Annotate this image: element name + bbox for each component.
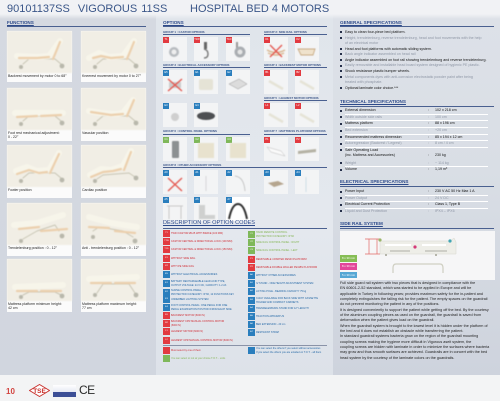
list: option codes left column bbox=[163, 230, 234, 344]
table: technical specifications: 1,19 m³ bbox=[435, 167, 447, 171]
option tile: hand remote bbox=[163, 137, 187, 161]
option tile: resin platform bbox=[264, 137, 288, 161]
option tile: stand bbox=[295, 170, 319, 194]
list: option codes right column: SIDE RAIL CONTROL PANEL : RIGHT bbox=[256, 241, 299, 244]
option tile: extension: A6 bbox=[195, 198, 199, 201]
option tile: traction bbox=[163, 197, 187, 221]
list: option codes left column: T1 bbox=[165, 232, 168, 234]
text block: side rail description: It is designed conveniently to support the patient while getting off the bed. By the courtesy bbox=[340, 308, 489, 312]
option tile: restraint: A7 bbox=[227, 198, 231, 201]
table: technical specifications: +20 cm bbox=[435, 128, 447, 132]
table: technical specifications: ~ 114 kg bbox=[435, 160, 449, 164]
list: option codes left column: K2 bbox=[165, 265, 168, 267]
list: option codes left column: E1 bbox=[165, 282, 168, 284]
list: option codes right column: A1 bbox=[250, 282, 253, 284]
text block: side rail description: When the guardrail system is brought to the lowest level it is hidden under the platform of bbox=[340, 324, 488, 328]
option tile: no side rail: K1 bbox=[265, 38, 269, 41]
heading: description of option codes: DESCRIPTION OF OPTION CODES bbox=[163, 220, 255, 226]
page canvas: Easy to clean four-piece bed platform. bbox=[345, 30, 406, 34]
table: electrical specifications: : bbox=[428, 196, 429, 200]
list: option codes left column: LEGREST MOTOR (6000 N) bbox=[171, 330, 203, 333]
table: technical specifications: Mattress platform bbox=[345, 121, 373, 125]
code C1 bbox=[248, 231, 294, 238]
card: maximum height: Mattress platform maximum height: bbox=[82, 302, 137, 306]
text block: side rail description: applicable in Turkey in following years; provides maximum safety for the in-patient and bbox=[340, 292, 483, 296]
row: external dimension bbox=[340, 107, 495, 109]
option tile: no accessory bbox=[163, 170, 187, 194]
page canvas: Back angle indicator assembled on head rail bbox=[345, 52, 416, 56]
row: width outside bbox=[340, 114, 495, 116]
row: recommended mattress bbox=[340, 134, 495, 136]
list: option codes left column: L1 bbox=[165, 330, 168, 332]
code K2 bbox=[163, 263, 194, 270]
option tile: left rail panel: C3 bbox=[227, 138, 231, 141]
card: foot rest adjustment: Foot rest mechanical adjustment: bbox=[8, 131, 60, 135]
bullet: motor movements bbox=[340, 36, 482, 45]
diagram: side rail system bbox=[340, 231, 495, 280]
list: option codes right column bbox=[248, 231, 318, 336]
list: option codes left column: UNDERBED LIGHTING SYSTEM bbox=[171, 298, 209, 301]
code P1 bbox=[248, 256, 307, 263]
list: option codes right column: TRACTION APPARATUS bbox=[256, 315, 284, 318]
page canvas: Optional laminate color choice.*** bbox=[345, 86, 398, 90]
row: current protection bbox=[340, 201, 495, 203]
option tile: back motor 1 bbox=[264, 70, 288, 94]
table: technical specifications: Width outside side rails bbox=[345, 114, 382, 118]
option tile: foot pedal: E4 bbox=[195, 104, 199, 107]
list: option codes right column: A6 bbox=[250, 323, 253, 325]
list: option codes left column: FOOT CONTROL PEDAL: ONE PEDAL FOR ONE bbox=[171, 304, 227, 307]
option tile: x-ray: A3 bbox=[265, 171, 269, 174]
option tile: resin platform: P1 bbox=[265, 138, 269, 141]
table: technical specifications: : bbox=[428, 128, 429, 132]
heading: technical specifications: TECHNICAL SPECIFICATIONS bbox=[340, 99, 406, 104]
option tile: nurse panel: E2 bbox=[227, 71, 231, 74]
option tile: foot pedal bbox=[194, 103, 218, 127]
list: option codes left column: E4 bbox=[165, 306, 168, 308]
option tile: lifting pole bbox=[226, 170, 250, 194]
option tile: back motor 2 bbox=[295, 70, 319, 94]
code A7 bbox=[248, 329, 279, 336]
row: power input bbox=[340, 188, 495, 190]
code T1 bbox=[163, 230, 223, 237]
option tile: castor 3: T1D bbox=[227, 38, 231, 41]
text block: side rail description bbox=[340, 281, 495, 369]
option tile: IV stand: A1 bbox=[195, 171, 199, 174]
card: foot rest adjustment: 0 - 22° bbox=[8, 135, 18, 139]
option tile: no side rail bbox=[264, 37, 288, 61]
icon: TSE mark: TSE bbox=[33, 388, 46, 395]
table: electrical specifications bbox=[340, 189, 495, 215]
option tile: castor 2 bbox=[194, 37, 218, 61]
table: technical specifications: 100 cm bbox=[435, 114, 447, 118]
list: option codes left column: E2 bbox=[165, 291, 168, 293]
text block: side rail description: completely extinguishes the falling risk for the patient. The empty spaces on the guardrail bbox=[340, 297, 488, 301]
card: cardiac position bbox=[81, 145, 146, 198]
lower rail bbox=[393, 264, 443, 273]
page canvas: treated with phosphate. bbox=[345, 80, 382, 84]
option tile: castor 3 bbox=[226, 37, 250, 61]
title: product type: HOSPITAL BED 4 MOTORS bbox=[190, 3, 329, 15]
markers bbox=[378, 238, 452, 249]
list: option codes left column: B2 bbox=[165, 322, 168, 324]
page canvas: You can select the others if you select without accessories bbox=[256, 347, 320, 350]
option tile: leg motor 2 bbox=[295, 103, 319, 127]
code T1W bbox=[163, 238, 232, 245]
list: option codes right column: C1 bbox=[250, 233, 253, 235]
table: technical specifications: Volume bbox=[345, 167, 357, 171]
code E2 bbox=[163, 289, 234, 296]
card: minimum height: 42 cm bbox=[8, 306, 18, 310]
legend: pink size label bbox=[340, 263, 357, 270]
list: option codes left column: PROTECTION CATEGORY: IP 66, 12 FUNCTIONS KEY bbox=[171, 293, 234, 296]
table: technical specifications: : bbox=[428, 134, 429, 138]
table: electrical specifications: Power Output bbox=[345, 196, 367, 200]
table: technical specifications: Autoregression (Backrest / Legrest) bbox=[345, 141, 402, 145]
code A1 bbox=[248, 280, 314, 287]
option tile: no electrical accessory bbox=[163, 70, 187, 94]
option tile: battery: E1 bbox=[195, 71, 199, 74]
list: option codes left column: OUTPUT VOLTAGE: 24 V DC, CAPACITY: 1.2 Ah bbox=[171, 284, 226, 287]
list: option codes left column: TWIN CASTOR Ø125 WITH BRAKE (100 MM) bbox=[171, 232, 223, 235]
legend: green size label: 8 x 30 mm bbox=[342, 256, 355, 260]
legend: green option note bbox=[163, 355, 226, 362]
table: electrical specifications: : bbox=[428, 189, 429, 193]
page canvas: Must select by one of them bbox=[171, 349, 201, 352]
table: technical specifications: : bbox=[428, 141, 429, 145]
text block: side rail description: Full side guard rail system with two pieces that is designed in compliance with the bbox=[340, 281, 475, 285]
list: option codes left column: T1W bbox=[164, 240, 169, 242]
group heading: side rail options: GROUP 2: SIDE RAIL OPTIONS bbox=[264, 30, 307, 34]
code A0 bbox=[248, 272, 296, 279]
list: option codes right column: A7 bbox=[250, 331, 253, 333]
option tile: hand remote: C1 bbox=[164, 138, 168, 141]
legend: blue size label bbox=[340, 272, 357, 278]
code C3 bbox=[248, 247, 298, 254]
text block: side rail description: coupling screws making the hygiene more difficult in Vigorous aseit system, the bbox=[340, 340, 471, 344]
list: option codes left column: NURSE CONTROL PANEL, bbox=[171, 289, 202, 292]
table: electrical specifications: IPX4 – IPX6 bbox=[435, 208, 455, 212]
option tile: right rail panel bbox=[194, 137, 218, 161]
option tile: extension bbox=[194, 197, 218, 221]
list: option codes left column: L2 bbox=[165, 339, 168, 341]
table: technical specifications: Bed extension bbox=[345, 128, 368, 132]
page canvas: Height, trendelenburg, reverse trendelenburg, head and foot movements with the help bbox=[345, 36, 481, 40]
legend: blue option note bbox=[248, 347, 322, 354]
text block: side rail description: EN 60601-2-52 standard, which was started to be applied in Europe and will be bbox=[340, 286, 471, 290]
text block: side rail description: coupling screws are hidden with laminate in order to minimize the surfaces where bacteria bbox=[340, 345, 489, 349]
list: option codes right column: A2 bbox=[250, 290, 253, 292]
option tile: PE/ABS platform bbox=[295, 137, 319, 161]
option tile: right rail panel: C2 bbox=[195, 138, 199, 141]
card: maximum height bbox=[81, 259, 146, 312]
group heading: castor options: GROUP 1 : CASTOR OPTIONS bbox=[163, 30, 204, 34]
row: safe operating load: Safe Operating Load bbox=[345, 148, 378, 152]
option tile: back motor 2: B2 bbox=[296, 71, 300, 74]
group heading: other accessory options: GROUP 8 : OTHER ACCESSORY OPTIONS bbox=[163, 163, 221, 167]
list: option codes left column: B1 bbox=[165, 314, 168, 316]
card: cardiac position: Cardiac position bbox=[82, 188, 107, 192]
code A3 bbox=[248, 297, 318, 304]
list: option codes left column: E3 bbox=[165, 298, 168, 300]
card: backrest movement: Backrest movement by motor 0 to 68° bbox=[8, 74, 67, 78]
option tile: underbed lighting: E3 bbox=[164, 104, 168, 107]
list: option codes left column: BACKREST MOTOR (6000 N) bbox=[171, 314, 205, 317]
option tile: castor 2: T1W bbox=[194, 38, 200, 41]
option tile: no electrical accessory: E5 bbox=[164, 71, 168, 74]
list: option codes right column: A0 bbox=[250, 274, 253, 276]
list: option codes left column: BACKREST CPR MANUAL CONTROL MOTOR bbox=[171, 320, 224, 323]
option tile: left rail panel bbox=[226, 137, 250, 161]
card: foot rest adjustment bbox=[7, 88, 72, 141]
page canvas: Shock resistance plastic bumper wheels. bbox=[345, 68, 410, 72]
group heading: backrest motor options: GROUP 4 : BACKREST MOTOR OPTIONS bbox=[264, 62, 321, 66]
table: electrical specifications: Electrical Current Protection bbox=[345, 202, 390, 206]
group heading: electrical accessory options: GROUP 3 : ELECTRICAL ACCESSORY OPTIONS bbox=[163, 62, 229, 66]
option tile: PE/ABS platform: P2 bbox=[296, 138, 300, 141]
list: option codes right column: REMOVABLE DOUBLE WALLED PE/ABS PLATFORM bbox=[256, 266, 317, 269]
card: backrest movement bbox=[7, 31, 72, 82]
row: safe operating load: : bbox=[428, 153, 429, 157]
list: option codes left column: T1D bbox=[164, 248, 169, 250]
text block: side rail description: do not prevent monitoring the patient in any of the positions. bbox=[340, 302, 439, 306]
table: electrical specifications: Liquid and Dust Protection bbox=[345, 208, 387, 212]
card: vascular position: Vascular position bbox=[82, 131, 108, 135]
list: option codes left column: CASTOR CENTRAL & DIRECTIONAL LOCK (100 MM) bbox=[171, 240, 232, 243]
card: vascular position bbox=[81, 88, 146, 141]
text block: side rail description: head system by the courtesy of the laminate colors on the guardrails. bbox=[340, 356, 454, 360]
card: minimum height bbox=[7, 259, 72, 312]
page canvas: If you select the others you are entailed on T.O.T. - all them bbox=[256, 351, 321, 354]
option tile: x-ray bbox=[264, 170, 288, 194]
list: option codes left column: (6000 N) bbox=[171, 324, 181, 327]
option tile: restraint bbox=[226, 197, 250, 221]
card: kneerest movement: Kneerest movement by motor 0 to 27° bbox=[82, 74, 141, 78]
icon: certification badge bbox=[53, 385, 76, 397]
option tile: nurse panel bbox=[226, 70, 250, 94]
heading: electrical specifications: ELECTRICAL SPECIFICATIONS bbox=[340, 179, 408, 184]
card: trendelenburg position bbox=[7, 203, 72, 256]
code B1 bbox=[163, 312, 205, 319]
list: option codes right column: PROTECTION CATEGORY: IP 66 bbox=[256, 235, 294, 238]
option tile: leg motor 2: L2 bbox=[297, 104, 299, 107]
panel: options bbox=[163, 20, 327, 229]
table: technical specifications: : bbox=[428, 167, 429, 171]
list: option codes right column: REMOVABLE 4 PARTED RESIN PLATFORM bbox=[256, 258, 307, 261]
row: liquid and dust protection bbox=[340, 208, 495, 210]
code T1D bbox=[163, 246, 232, 253]
page canvas: You can select or not at your choice T.O.T. - units bbox=[171, 357, 225, 360]
code A4 bbox=[248, 305, 309, 312]
list: option codes left column: E5 bbox=[165, 273, 168, 275]
option tile: battery bbox=[194, 70, 218, 94]
option tile: underbed lighting bbox=[163, 103, 187, 127]
list: option codes right column: SIDE RAIL CONTROL PANEL : LEFT bbox=[256, 249, 298, 252]
table: technical specifications bbox=[340, 108, 495, 174]
option tile: traction: A5 bbox=[164, 198, 168, 201]
code L1 bbox=[163, 328, 203, 335]
row: volume bbox=[340, 166, 495, 168]
option tile: PE side rail bbox=[295, 37, 319, 61]
code K1 bbox=[163, 255, 196, 262]
list: option codes right column: RESTRAINT STRAP bbox=[256, 331, 279, 334]
option tile: stand: A4 bbox=[296, 171, 300, 174]
panel: functions bbox=[6, 20, 146, 312]
table: technical specifications: 85 x 194 x 12 cm bbox=[435, 134, 462, 138]
list: option codes right column: C3 bbox=[250, 249, 253, 251]
page canvas: Easily removable and installable head board system designed of hygienic PE plastic. bbox=[345, 63, 480, 67]
code B2 bbox=[163, 320, 224, 327]
option tile: lifting pole: A2 bbox=[227, 171, 231, 174]
footer: page number: 10 bbox=[6, 387, 15, 396]
group heading: mattress platform options: GROUP 7 : MATTRESS PLATFORM OPTIONS bbox=[264, 129, 326, 133]
row: mattress platform bbox=[340, 120, 495, 122]
table: technical specifications: : bbox=[428, 160, 429, 164]
option tile: leg motor 1: L1 bbox=[266, 104, 268, 107]
row: safe operating load bbox=[340, 148, 495, 160]
heading: general specifications: GENERAL SPECIFICATIONS bbox=[340, 20, 402, 25]
heading: options: OPTIONS bbox=[163, 20, 184, 25]
table: electrical specifications: Class 1, Type B bbox=[435, 202, 460, 206]
text block: side rail description: may grow and thus smooth surfaces are achieved. Guardrails are in concert with the bed bbox=[340, 350, 487, 354]
card: kneerest movement bbox=[81, 31, 146, 82]
list: option codes left column: WITHOUT SIDE RAIL bbox=[171, 257, 195, 260]
list: option codes right column: A5 bbox=[250, 315, 253, 317]
list: option codes right column: IV STAND - ONE HEIGHT ADJUSTMENT SYSTEM bbox=[256, 282, 313, 285]
list: option codes right column: C2 bbox=[250, 241, 253, 243]
list: option codes left column: LEGREST CPR MANUAL CONTROL MOTOR (6000 N) bbox=[171, 339, 233, 342]
list: option codes right column: P2 bbox=[250, 266, 253, 268]
code C2 bbox=[248, 239, 300, 246]
background: right column bbox=[333, 0, 500, 375]
table: technical specifications: Recommended mattress dimension bbox=[345, 134, 402, 138]
legend: blue size label: 5 x 30 mm bbox=[342, 272, 355, 276]
legend: pink size label: 8 x 30 mm bbox=[342, 264, 355, 268]
heading: side rail system: SIDE RAIL SYSTEM bbox=[340, 221, 383, 226]
table: electrical specifications: 24 V DC bbox=[435, 196, 449, 200]
list: option codes right column: A4 bbox=[250, 307, 253, 309]
card: fowler position bbox=[7, 145, 72, 198]
list: option codes right column: HOLDER AND COMPACT CABINETS bbox=[256, 301, 298, 304]
option tile: castor 1 bbox=[163, 37, 187, 61]
legend: green size label bbox=[340, 255, 357, 262]
table: technical specifications: : bbox=[428, 114, 429, 118]
table: technical specifications: Weight bbox=[345, 160, 356, 164]
list: option codes left column: CASTOR CENTRAL & DIRECTIONAL LOCK (150 MM) bbox=[171, 248, 232, 251]
card: anti-trendelenburg position bbox=[81, 203, 146, 256]
list: option codes right column: A3 bbox=[250, 299, 253, 301]
list: option codes left column: PEDAL EXAMINATION POSITION FROM EACH SIDE bbox=[171, 308, 232, 311]
option tile: PE side rail: K2 bbox=[296, 38, 300, 41]
table: technical specifications: 102 x 218 cm bbox=[435, 108, 457, 112]
row: bed extension bbox=[340, 127, 495, 129]
group heading: legrest motor options: GROUP 5 : LEGREST MOTOR OPTIONS bbox=[264, 96, 318, 100]
legend: red option note bbox=[163, 347, 201, 354]
table: technical specifications: : bbox=[428, 108, 429, 112]
bullet: metal components bbox=[340, 74, 495, 76]
table: electrical specifications: : bbox=[428, 208, 429, 212]
page canvas: Angle indicator assembled on foot rail showing trendelenburg and reverse trendelenburg. bbox=[345, 58, 486, 62]
code E1 bbox=[163, 280, 226, 287]
heading: functions: FUNCTIONS bbox=[7, 20, 34, 25]
row: power output bbox=[340, 194, 495, 196]
list: option codes right column: HAND REMOTE CONTROL bbox=[256, 231, 287, 234]
page canvas: Head and foot platforms with automatic sliding system. bbox=[345, 46, 432, 50]
row: autoregression bbox=[340, 140, 495, 142]
text block: side rail description: In standard guardrail systems bacteria grow on the region of the guardrail mounting bbox=[340, 334, 478, 338]
code L2 bbox=[163, 337, 233, 344]
text block: side rail description: deformation when the patient gives load on the guardrail. bbox=[340, 318, 434, 322]
option tile: back motor 1: B1 bbox=[265, 71, 269, 74]
row: safe operating load: (inc. Mattress and Accessories) bbox=[345, 153, 395, 157]
table: electrical specifications: : bbox=[428, 202, 429, 206]
option tile: leg motor 1 bbox=[264, 103, 288, 127]
text block: side rail description: of the aluminum coupling pieces as used on the guardrail, the guardrail is saved from bbox=[340, 313, 481, 317]
code A6 bbox=[248, 321, 286, 328]
row: weight bbox=[340, 160, 495, 162]
code E5 bbox=[163, 271, 218, 278]
rail top view bbox=[380, 238, 456, 256]
card: fowler position: Fowler position bbox=[8, 188, 32, 192]
table: electrical specifications: 230 V AC 50 Hz Max 1 A bbox=[435, 189, 475, 193]
option tile: IV stand bbox=[194, 170, 218, 194]
list: option codes right column: P1 bbox=[250, 258, 253, 260]
background: middle column bbox=[156, 0, 333, 375]
card: anti-trendelenburg position: Anti - trendelenburg position : 0 - 12° bbox=[82, 246, 139, 250]
list: option codes right column: BED EXTENSION - 20 cm bbox=[256, 323, 285, 326]
list: option codes right column: LIFTING POLE - BEARING CAPACITY 75 kg bbox=[256, 290, 306, 293]
text block: side rail description: the bed and it does not establish an obstacle while transferring the patient. bbox=[340, 329, 463, 333]
code E3 bbox=[163, 296, 209, 303]
code E4 bbox=[163, 304, 232, 311]
table: technical specifications: 8 cm / 4 cm bbox=[435, 141, 454, 145]
option tile: castor 1: T1 bbox=[164, 38, 168, 41]
table: technical specifications: External dimension bbox=[345, 108, 376, 112]
group heading: control panel options: GROUP 6 : CONTROL PANEL OPTIONS bbox=[163, 129, 217, 133]
card: trendelenburg position: Trendelenburg position : 0 - 12° bbox=[8, 246, 57, 250]
code A2 bbox=[248, 288, 306, 295]
list: option codes left column: WITH PE SIDE RAIL bbox=[171, 265, 194, 268]
title: product code and name: 90101137SS VIGOROUS 11SS bbox=[7, 3, 167, 15]
option tile: no accessory: A0 bbox=[164, 171, 168, 174]
row: safe operating load: 230 kg bbox=[435, 153, 446, 157]
list: option codes right column: X-RAY AVAILABLE FOR BACK SIDE WITH CASSETTE bbox=[256, 297, 318, 300]
code A5 bbox=[248, 313, 284, 320]
card: maximum height: 77 cm bbox=[82, 306, 92, 310]
page canvas: Metal components dyes with anti-corrosion electrostatic powder paint after being bbox=[345, 74, 473, 78]
background: left column bbox=[0, 0, 156, 375]
list: option codes left column: K1 bbox=[165, 257, 168, 259]
page canvas: of an electrical motor bbox=[345, 41, 378, 45]
code P2 bbox=[248, 264, 317, 271]
red dimension bracket bbox=[365, 239, 380, 254]
icon: TSE mark bbox=[29, 384, 50, 397]
icon: CE mark: CE bbox=[79, 383, 95, 397]
list: option codes right column: WITHOUT OTHER ACCESSORIES bbox=[256, 274, 296, 277]
table: technical specifications: : bbox=[428, 121, 429, 125]
table: electrical specifications: Power Input bbox=[345, 189, 364, 193]
list: option codes left column: BATTERY RECHARGEABLE LEAD ACID TYPE, bbox=[171, 280, 225, 283]
table: technical specifications: 88 x 196 cm bbox=[435, 121, 455, 125]
list: option codes left column: WITHOUT ELECTRICAL ACCESSORIES bbox=[171, 273, 217, 276]
list: option codes right column: TRENDELENBURG STAND FOR 12° LENGTH bbox=[256, 307, 309, 310]
card: minimum height: Mattress platform minimum height: bbox=[8, 302, 62, 306]
